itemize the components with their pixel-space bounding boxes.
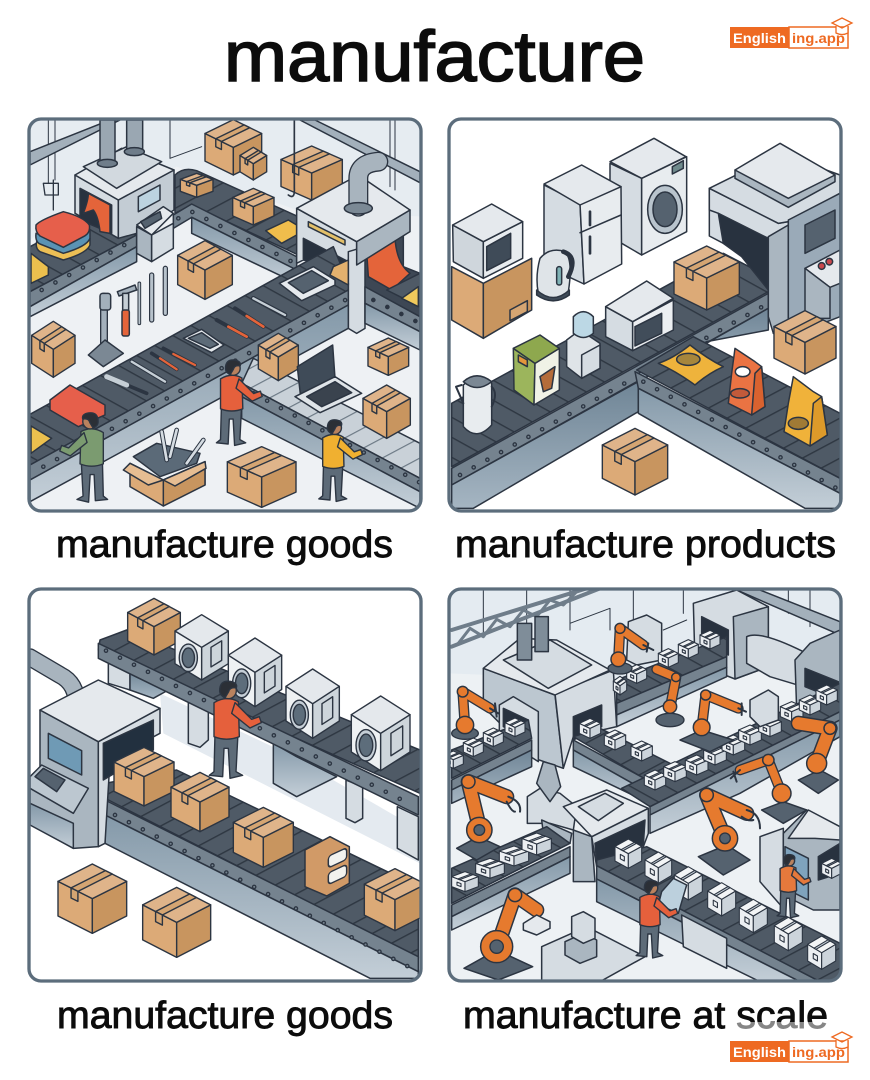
cardboard box with microwave: [452, 204, 532, 338]
box: left: [32, 321, 75, 377]
box: mid: [178, 241, 232, 299]
yellow package: [266, 220, 297, 243]
snack packs: [658, 345, 827, 446]
logo: top: [730, 18, 852, 48]
conveyor A: [452, 720, 532, 803]
worker: at machine: [777, 855, 811, 918]
tools on display: [88, 268, 165, 367]
taller boxes on conveyor F: [615, 839, 836, 969]
worker: operator: [636, 880, 678, 958]
logo: top: ing.app: [792, 30, 845, 46]
washers: [175, 615, 410, 771]
logo: bottom: [730, 1032, 852, 1062]
laptop: [295, 345, 362, 413]
robot arms: [452, 623, 838, 980]
box over machine: [774, 311, 836, 374]
big machine: [483, 617, 617, 768]
box: right: [368, 338, 409, 375]
boxes on lower conveyor: [114, 747, 426, 931]
title: manufacture: [224, 18, 645, 97]
microwave on belt: [606, 281, 673, 351]
machine: [709, 143, 840, 337]
water dispenser: [567, 312, 600, 378]
caption: manufacture goods (second): manufacture goods: [57, 995, 393, 1037]
panel: manufacture products (appliances and food): [447, 117, 843, 513]
ceiling beams: [30, 120, 420, 183]
worker: green shirt: [60, 413, 108, 502]
box on floor: [602, 428, 668, 495]
panel: manufacture goods (tools and clothes line): [27, 117, 423, 513]
back machines: [627, 590, 840, 710]
worker: orange shirt: [216, 360, 262, 445]
worker: [209, 681, 261, 778]
control console with screen: [658, 878, 687, 913]
flat boxes on conveyor E: [452, 833, 551, 892]
box: opened with parts: [258, 333, 298, 381]
main conveyor: [30, 247, 348, 502]
machine left: [75, 120, 174, 262]
box on upper conveyor: [128, 598, 180, 655]
conveyor C and D: [573, 683, 840, 833]
kettle: [537, 250, 572, 301]
conveyor F: [597, 847, 840, 982]
caption: manufacture at scale: manufacture at scale: [463, 995, 828, 1037]
right-edge conveyor: [365, 273, 420, 350]
box: bottom: [227, 447, 296, 507]
small machine bottom: [542, 912, 645, 982]
caption: manufacture products: manufacture products: [455, 524, 836, 566]
boxes: back: [180, 120, 342, 225]
back conveyor left: [30, 225, 138, 318]
conveyor E: [452, 827, 570, 930]
small boxes on belts: [443, 630, 837, 790]
cereal box: [513, 335, 559, 405]
washing machine: [610, 138, 687, 255]
worker: yellow shirt: [319, 420, 362, 501]
items on main belt: [31, 253, 348, 453]
legs and stands of upper conveyor: [108, 657, 418, 860]
hook: [288, 120, 294, 196]
caption: manufacture goods: manufacture goods: [56, 524, 393, 566]
loose boxes: [58, 864, 211, 957]
clothes stack: [30, 180, 90, 280]
left conveyor: [452, 253, 768, 508]
conveyor B: [617, 637, 727, 727]
panel: manufacture goods (washers and boxes): [27, 587, 426, 983]
upper conveyor: [98, 630, 420, 815]
steel jug: [456, 376, 495, 434]
lower right conveyor: [242, 358, 420, 508]
pipe: [30, 657, 77, 705]
machine right: [297, 162, 420, 333]
machine: [30, 680, 160, 848]
logo: top: English: [733, 30, 786, 46]
lower conveyor: [105, 770, 418, 978]
right conveyor: [635, 337, 840, 508]
logo: bottom: English: [733, 1044, 786, 1060]
panel: manufacture at scale (robot factory): [443, 587, 843, 983]
back conveyor right: [173, 169, 298, 283]
conveyor box: [674, 246, 739, 310]
central machine: [527, 762, 648, 882]
fridge: [544, 165, 622, 284]
ceiling truss: [452, 588, 840, 647]
box: lower right: [363, 385, 410, 438]
right machine: [750, 690, 842, 910]
open box with parts: [123, 430, 206, 506]
logo: bottom: ing.app: [792, 1044, 845, 1060]
